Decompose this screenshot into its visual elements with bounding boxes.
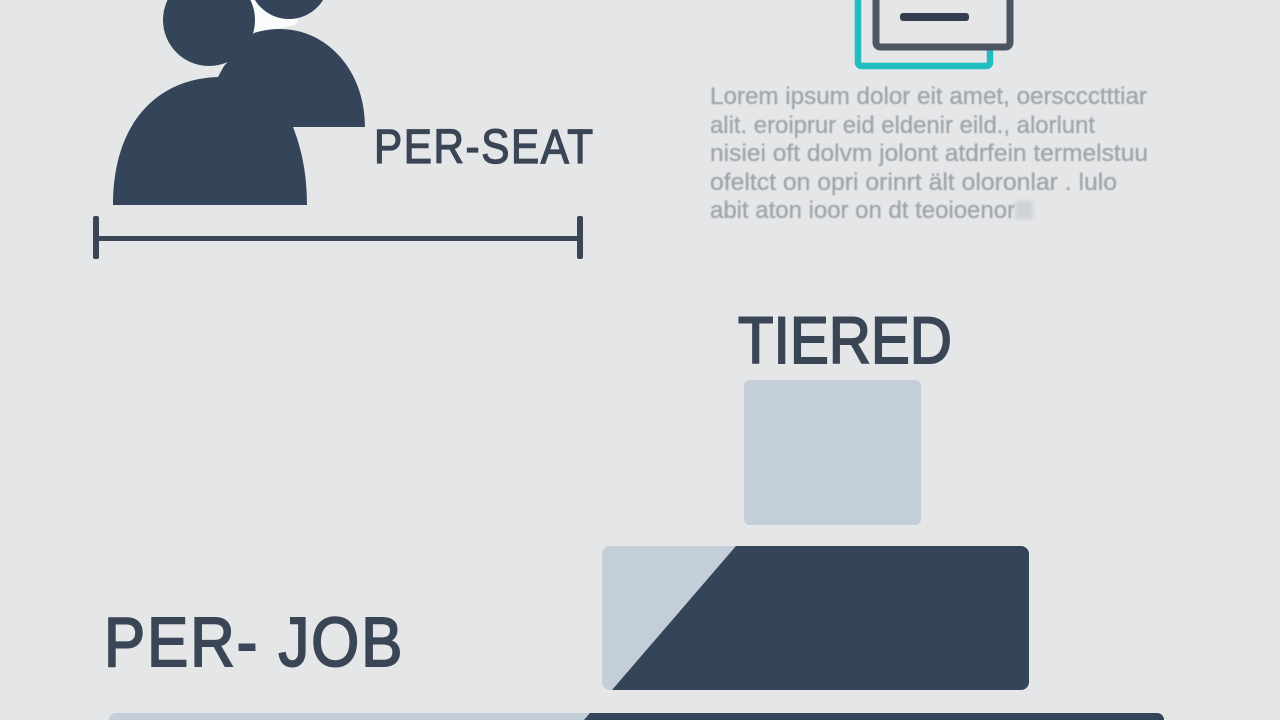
text block: lorem ipsum: Lorem ipsum dolor eit amet, oersccctttiar (710, 83, 1147, 110)
tier: bottom bar (109, 713, 1164, 720)
icon: people (113, 0, 365, 205)
text block: lorem ipsum: abit aton ioor on dt teoioenor (710, 197, 1015, 224)
text block: lorem ipsum: ofeltct on opri orinrt ält oloronlar . lulo (710, 169, 1117, 196)
tier: middle block (602, 546, 1029, 690)
heading: tiered: TIERED (738, 305, 952, 378)
text block: lorem ipsum: alit. eroiprur eid eldenir eild., alorlunt (710, 112, 1095, 139)
tier: top block (744, 380, 921, 525)
heading: per-job: PER- JOB (104, 602, 402, 681)
scale bracket (93, 216, 583, 259)
text block: lorem ipsum: nisiei oft dolvm jolont atdrfein termelstuu (710, 140, 1148, 167)
heading: per-seat: PER-SEAT (374, 119, 593, 174)
text smudge (1015, 201, 1033, 219)
icon: stacked documents (858, 0, 1010, 66)
text block: lorem ipsum (710, 83, 1148, 224)
